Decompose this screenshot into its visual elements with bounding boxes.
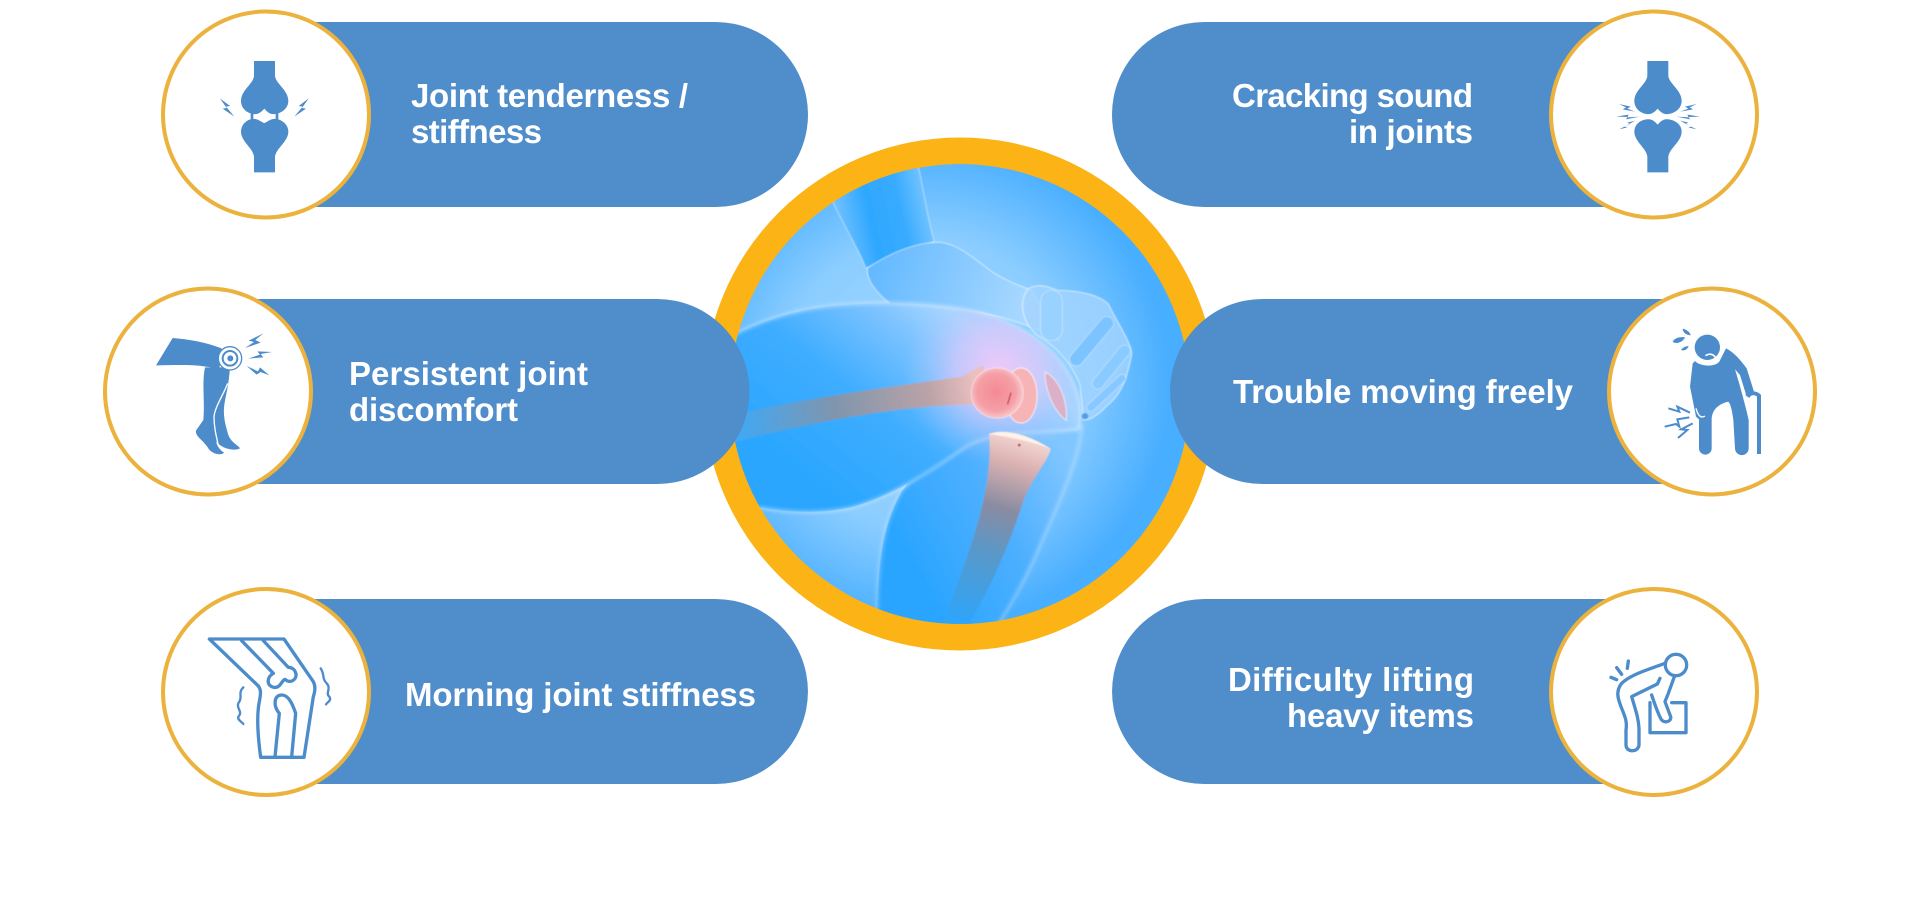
label: Difficulty lifting xyxy=(1228,661,1474,698)
label: Cracking sound xyxy=(1232,77,1473,114)
femur xyxy=(735,365,984,442)
panel: morning stiffness xyxy=(163,589,808,795)
pill xyxy=(266,599,808,784)
pill xyxy=(1112,599,1654,784)
lower leg xyxy=(876,426,1082,630)
label xyxy=(1228,661,1474,734)
central knee illustration xyxy=(704,138,1216,650)
circle badge xyxy=(105,288,311,494)
knee glow xyxy=(909,312,1066,458)
panel: persistent discomfort xyxy=(105,288,749,494)
tibia xyxy=(941,432,1051,626)
forearm xyxy=(867,242,1059,340)
pill xyxy=(208,299,749,484)
label: in joints xyxy=(1349,113,1473,150)
label: discomfort xyxy=(349,391,518,428)
upper arm xyxy=(823,141,934,268)
label: stiffness xyxy=(411,113,542,150)
circle badge xyxy=(1609,288,1815,494)
panel: cracking sound xyxy=(1112,12,1757,218)
panel: difficulty lifting xyxy=(1112,589,1757,795)
label xyxy=(1232,77,1473,150)
hand xyxy=(1023,286,1132,420)
infographic: knee joint symptoms xyxy=(103,10,1817,797)
label: heavy items xyxy=(1287,697,1474,734)
patella xyxy=(1045,372,1067,420)
yellow ring xyxy=(704,138,1216,650)
label: Joint tenderness / xyxy=(411,77,688,114)
circle badge xyxy=(1551,589,1757,795)
pill xyxy=(1170,299,1712,484)
femoral condyles xyxy=(1005,368,1037,423)
icon: legs with knee pain xyxy=(156,333,272,454)
circle badge xyxy=(163,589,369,795)
label xyxy=(411,77,688,150)
thigh xyxy=(716,303,1081,512)
label: Persistent joint xyxy=(349,355,588,392)
label: Trouble moving freely xyxy=(1233,373,1574,410)
blue anatomy scene xyxy=(735,164,1185,624)
icon: knee outline with stiffness lines xyxy=(209,639,330,757)
icon: joint with pain bolts xyxy=(220,61,309,172)
icon: joint with cracking bolts xyxy=(1616,61,1700,172)
panel: joint tenderness xyxy=(163,12,808,218)
icon: stooped person with cane xyxy=(1665,329,1761,455)
circle badge xyxy=(163,12,369,218)
panel: trouble moving xyxy=(1170,288,1815,494)
circle badge xyxy=(1551,12,1757,218)
label xyxy=(349,355,588,428)
icon: person lifting box xyxy=(1611,654,1687,751)
label: Morning joint stiffness xyxy=(405,676,756,713)
pill xyxy=(266,22,808,207)
pill xyxy=(1112,22,1654,207)
